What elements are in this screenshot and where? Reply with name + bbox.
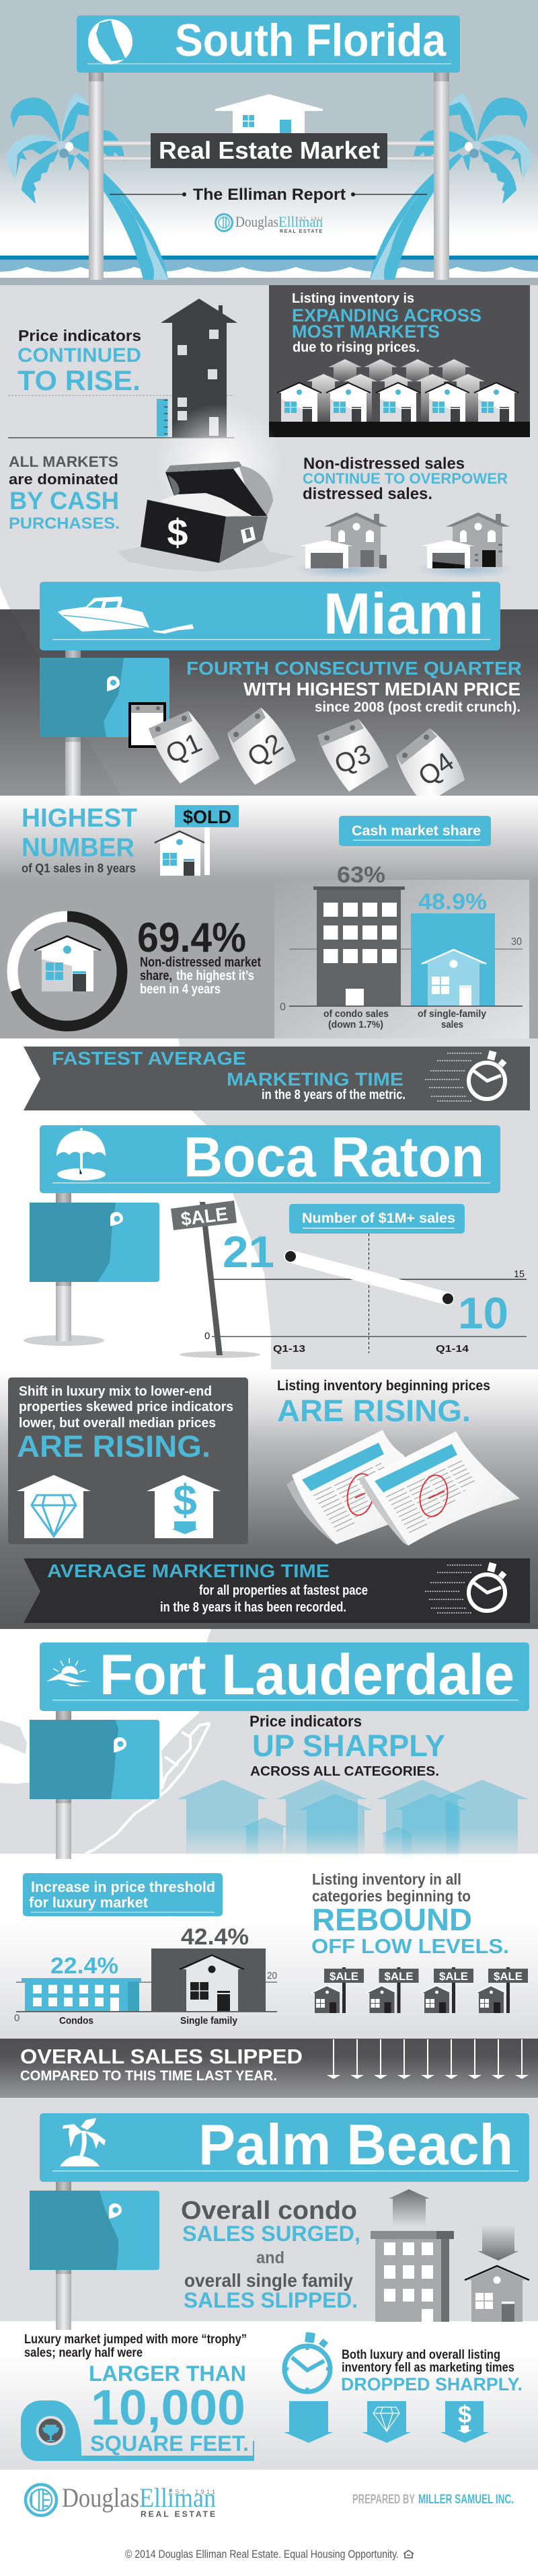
text: price indicators continued to rise [17,327,141,396]
bottom section background [0,2321,538,2470]
banner: overall sales slipped: COMPARED TO THIS TIME LAST YEAR. [20,2068,277,2084]
icon: white house [215,94,323,134]
Miami band background [0,586,538,796]
text: both luxury and overall listing [341,2348,523,2394]
axis labels: Single family [180,2015,238,2026]
footer background [0,2470,538,2576]
text: 69.4% non-distressed share: share, [140,969,172,983]
translucent rising arrows [177,1780,529,1858]
heading: Boca Raton: Boca Raton [184,1125,484,1188]
line chart: number of $1M+ sales: 21 [223,1227,274,1277]
text: highest number of Q1 sales: NUMBER [22,833,134,862]
banner: fastest average marketing time: MARKETING TIME [227,1069,404,1090]
text: 69.4% non-distressed share: the highest it’s [176,969,254,983]
bar chart: cash market share: 30 [511,936,522,948]
text: listing inventory rebound [311,1870,509,1958]
row of four for-sale houses: $ALE [385,1970,413,1983]
banner: overall sales slipped [0,2039,538,2098]
icon: up arrow with dollar [147,1475,221,1538]
icon: up arrow with diamond [16,1475,91,1538]
banner: average marketing time: for all properties at fastest pace [199,1583,368,1598]
panel text: due to rising prices. [293,340,420,355]
text: overall condo sales surged: SALES SLIPPED. [184,2288,358,2312]
overview background [0,285,538,609]
row of four for-sale houses: $ALE [494,1970,523,1983]
panel text [292,291,482,355]
title sign: South Florida [77,15,460,73]
sign: Miami [40,582,500,797]
map panel: Boca Raton [24,1203,159,1346]
text: listing inventory beginning prices [277,1378,490,1428]
logo: Douglas Elliman: REAL ESTATE [141,2509,215,2519]
map panel: Miami [40,658,169,737]
banner: overall sales slipped: OVERALL SALES SLIPPED [20,2045,303,2068]
label: increase in price threshold: Increase in price threshold [31,1879,215,1895]
banner: average marketing time: in the 8 years it has been recorded. [160,1600,346,1615]
Palm Beach background [0,2098,538,2321]
bar: condo building 63% [313,862,405,1006]
icon: down arrow with dollar [440,2400,489,2443]
heading: Fort Lauderdale: Fort Lauderdale [100,1643,514,1707]
icon: down arrow with diamond [362,2401,411,2443]
icon: stopwatch [425,1051,506,1101]
bar: single-family 48.9%: 48.9% [418,889,487,915]
panel: shift in luxury mix [8,1377,248,1544]
calendar page: Q3: Q3 [330,739,375,780]
text: fourth consecutive quarter [186,658,522,715]
text: luxury market trophy sales: sales; nearly half were [24,2346,143,2360]
sign: Fort Lauderdale [40,1642,529,1859]
text: 69.4% non-distressed share: been in 4 years [140,982,221,997]
text: 69.4% non-distressed share [137,915,261,997]
text: non-distressed sales [303,455,508,503]
sign: Boca Raton [40,1125,500,1342]
text: listing inventory rebound: Listing inventory in all [312,1870,461,1888]
text: 69.4% non-distressed share: Non-distressed market [140,955,261,970]
text: overall condo sales surged: and [256,2248,284,2267]
ghost arrows [307,359,485,422]
text: listing inventory rebound: OFF LOW LEVELS. [311,1934,509,1958]
icon: up arrow with dollar: $ [173,1476,197,1524]
row of four for-sale houses: $ALE [439,1970,468,1983]
calendar page: Q4 [396,728,465,805]
bar chart: cash market share [280,862,523,1030]
banner: fastest average marketing time: in the 8 years of the metric. [262,1088,406,1102]
text: both luxury and overall listing: DROPPED SHARPLY. [341,2374,523,2394]
bar chart: price threshold increase: 20 [267,1970,277,1981]
ocean waves [0,256,538,285]
label: increase in price threshold: for luxury market [29,1894,149,1911]
text: non-distressed sales: distressed sales. [303,485,432,503]
luxury section background [0,1369,538,1629]
bar: condos 22.4%: 22.4% [50,1953,118,1979]
text: luxury market trophy sales: Luxury market jumped with more “trophy” [24,2333,247,2347]
text: fourth consecutive quarter: FOURTH CONSECUTIVE QUARTER [186,658,522,679]
icon: house with down arrow [465,2225,529,2322]
text: overall condo sales surged [181,2197,360,2312]
logo: Douglas Elliman small: REAL ESTATE [280,229,322,234]
icon: beach umbrella [56,1128,106,1180]
map panel: Palm Beach [30,2191,159,2270]
icon: two grey houses [293,513,515,578]
panel text: EXPANDING ACROSS [292,305,482,326]
text: overall condo sales surged: Overall condo [181,2197,357,2225]
map panel: Fort Lauderdale [30,1720,159,1799]
title text: South Florida [175,15,447,66]
text: luxury market trophy sales: 10,000 [91,2380,245,2435]
text: all markets dominated by cash: PURCHASES. [9,515,120,533]
text: overall condo sales surged: overall single family [184,2270,353,2291]
text: price indicators up sharply: UP SHARPLY [252,1729,445,1763]
line chart: number of $1M+ sales: 15 [514,1268,525,1280]
banner: average marketing time: AVERAGE MARKETING TIME [47,1560,330,1581]
logo: Douglas Elliman small [215,213,323,234]
row of four for-sale houses: $ALE [330,1970,358,1983]
label: increase in price threshold [23,1873,223,1916]
line chart: number of $1M+ sales: 10 [458,1288,508,1338]
sign: Palm Beach [40,2113,529,2330]
icon: house in donut [34,936,101,991]
label: cash market share [339,816,491,846]
bar: single-family 48.9% [411,889,495,1006]
text: both luxury and overall listing: Both luxury and overall listing [342,2348,500,2362]
credit: prepared by Miller Samuel [352,2493,514,2507]
label: number of $1M+ sales [289,1204,465,1234]
icon: sunset over waves [46,1658,91,1686]
icon: treasure chest of cash [118,404,295,572]
panel text: MOST MARKETS [292,321,440,342]
bar: single family 42.4% [151,1924,266,2012]
icon: Florida in oval [88,19,132,65]
axis labels: (down 1.7%) [328,1019,383,1030]
panel: listing inventory [269,285,530,437]
calendar page: Q3 [317,719,389,792]
panel text [17,1384,233,1464]
logo: Douglas Elliman [26,2483,216,2519]
row of four for-sale houses [311,1967,528,2013]
calendar page: Q2: Q2 [242,728,289,773]
text: price indicators up sharply [249,1712,445,1779]
logo: Douglas Elliman: EST. 1911 [169,2489,215,2495]
bar chart: cash market share: 0 [280,1001,286,1013]
luxury threshold background [0,1854,538,2039]
text: price indicators continued to rise: CONTINUED [17,344,141,367]
credit: prepared by Miller Samuel: PREPARED BY [352,2493,415,2507]
heading: Miami: Miami [323,582,484,646]
logo: Douglas Elliman small: Douglas [235,213,278,230]
axis labels: of condo sales [323,1008,389,1020]
banner: fastest average marketing time: FASTEST AVERAGE [52,1048,246,1069]
for sale sign [171,1201,237,1355]
text: both luxury and overall listing: inventory fell as marketing times [342,2361,514,2375]
icon: sold sign and house: $OLD [183,806,231,827]
text: non-distressed sales: Non-distressed sales [303,455,465,473]
subtitle: The Elliman Report: The Elliman Report [193,186,346,204]
Fort Lauderdale background and coast [0,1629,538,1854]
text: all markets dominated by cash: BY CASH [9,487,119,515]
text: non-distressed sales: CONTINUE TO OVERPOWER [303,470,508,487]
hero background [0,0,538,256]
logo: Douglas Elliman small: Elliman [278,213,323,230]
icon: down arrow plain [284,2401,333,2443]
text: highest number of Q1 sales: HIGHEST [22,804,137,833]
text: listing inventory rebound: REBOUND [312,1902,472,1937]
icon: down arrow with dollar: $ [458,2400,471,2428]
line chart: number of $1M+ sales: Q1-13 [273,1343,305,1355]
text: fourth consecutive quarter: since 2008 (post credit crunch). [315,699,521,715]
hero sign posts [89,73,449,280]
icon: boat [58,597,194,634]
down arrows [327,2039,529,2079]
label: Real Estate Market: Real Estate Market [159,137,380,164]
text: all markets dominated by cash: are dominated [9,471,118,488]
axis labels: Condos [59,2015,93,2026]
Boca background and coast [0,1038,538,1369]
text: all markets dominated by cash [9,453,120,533]
calendar page: Q2 [227,708,296,785]
line chart: number of $1M+ sales: Q1-14 [436,1343,469,1355]
text: 69.4% non-distressed share: 69.4% [137,915,246,961]
text: price indicators continued to rise: Price indicators [18,327,141,344]
banner: average marketing time [24,1558,530,1623]
panel text: Shift in luxury mix to lower-end [19,1384,212,1399]
logo: Douglas Elliman small: EST. 1911 [296,217,323,221]
text: listing inventory beginning prices: ARE RISING. [277,1394,471,1428]
icon: sold sign and house [155,805,239,876]
calendar page: Q4: Q4 [413,747,459,792]
text: highest number of Q1 sales [22,804,137,875]
icon: tall house with ruler [8,299,237,439]
text: price indicators up sharply: Price indicators [249,1712,362,1730]
icon: newspapers with red circles [286,1430,520,1546]
icon: palm on island [60,2118,106,2166]
line chart: number of $1M+ sales [171,1201,527,1358]
label: number of $1M+ sales: Number of $1M+ sales [302,1211,455,1226]
axis labels [323,1008,487,1030]
heading: Palm Beach: Palm Beach [198,2113,513,2177]
icon: wall calendar [130,704,165,747]
bar: condo building 63%: 63% [337,862,385,888]
bar: condos 22.4% [22,1953,141,2012]
text: luxury market trophy sales: LARGER THAN [89,2361,246,2386]
palm tree left [7,93,168,280]
copyright line: © 2014 Douglas Elliman Real Estate. Equal Housing Opportunity. [125,2548,399,2561]
text: fourth consecutive quarter: WITH HIGHEST MEDIAN PRICE [243,679,521,699]
icon: condo building with up arrow [371,2189,454,2322]
bar chart: price threshold increase: 0 [14,2012,20,2024]
axis labels [59,2015,238,2026]
icon: tape measure with trophy [21,2400,254,2461]
subtitle: The Elliman Report [110,186,427,204]
text: luxury market trophy sales [24,2333,249,2456]
icon: treasure chest of cash: $ [167,511,188,554]
label: cash market share: Cash market share [352,823,481,839]
panel text: lower, but overall median prices [19,1416,216,1431]
line chart: number of $1M+ sales: 0 [204,1330,210,1342]
bar chart: price threshold increase [14,1924,277,2026]
stats background [0,796,538,1038]
donut chart 69.4% [12,916,122,1026]
calendar page: Q1: Q1 [161,728,206,769]
axis labels: sales [441,1019,463,1030]
banner: fastest average marketing time [24,1047,530,1110]
logo: Douglas Elliman: Douglas [62,2483,139,2513]
panel text: ARE RISING. [17,1429,210,1464]
panel text: properties skewed price indicators [19,1400,233,1414]
icon: blue stopwatch [284,2332,330,2392]
text: overall condo sales surged: SALES SURGED, [182,2222,360,2246]
palm tree right [370,93,531,280]
text: price indicators up sharply: ACROSS ALL CATEGORIES. [250,1764,439,1779]
text: all markets dominated by cash: ALL MARKETS [9,453,118,470]
for sale sign: $ALE [180,1203,229,1229]
text: highest number of Q1 sales: of Q1 sales in 8 years [22,862,136,875]
icon: stopwatch [425,1562,506,1613]
text: listing inventory beginning prices: Listing inventory beginning prices [277,1378,490,1394]
calendar page: Q1 [149,711,220,784]
text: luxury market trophy sales: SQUARE FEET. [90,2431,249,2456]
logo: Douglas Elliman: Elliman [139,2483,216,2513]
panel text: Listing inventory is [292,291,414,306]
bar: single family 42.4%: 42.4% [181,1924,249,1950]
axis labels: of single-family [418,1008,487,1020]
row of five houses [277,383,518,422]
text: listing inventory rebound: categories beginning to [312,1887,471,1905]
text: price indicators continued to rise: TO RISE. [17,365,141,396]
